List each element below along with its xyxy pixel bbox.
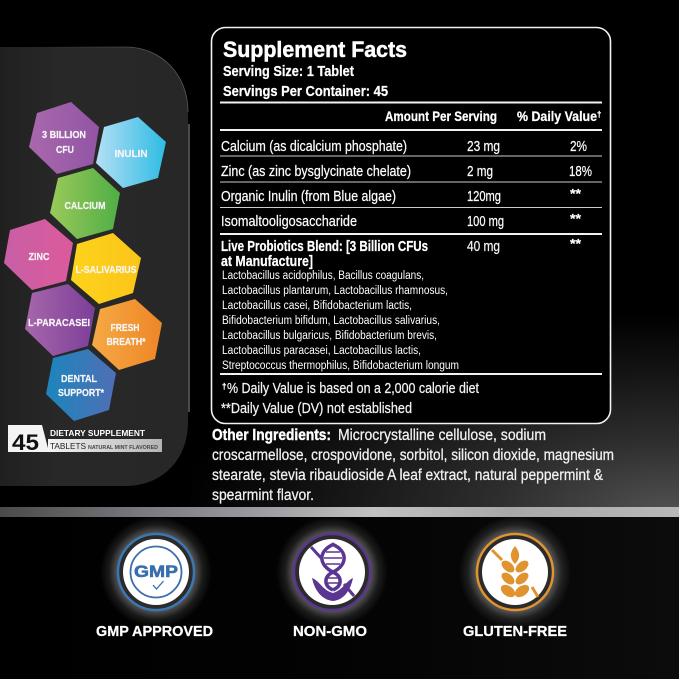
row: inulin: ** [570, 186, 582, 201]
hexagon: inulin: INULIN [114, 149, 148, 160]
row: calcium: Calcium (as dicalcium phosphate) [221, 139, 407, 155]
row: zinc: Zinc (as zinc bysglycinate chelate) [221, 164, 411, 180]
other ingredients: stearate, stevia ribaudioside A leaf extract, natural peppermint & [212, 467, 604, 484]
divider bar [0, 507, 679, 517]
row: inulin [221, 186, 582, 205]
hexagon: zinc: ZINC [28, 252, 50, 263]
row: probiotics blend: ** [570, 236, 582, 251]
footnote: DV not established: **Daily Value (DV) not established [221, 400, 412, 417]
probiotic strains list [222, 270, 459, 372]
background sheen [190, 300, 679, 507]
row: probiotics blend: 40 mg [467, 239, 500, 255]
badge: non-GMO: NON-GMO [293, 624, 367, 640]
hexagon: calcium [50, 168, 120, 239]
other ingredients [212, 427, 614, 504]
product count badge: NATURAL MINT FLAVORED [88, 445, 158, 451]
row: isomaltooligosaccharide: ** [570, 211, 582, 226]
badge: GMP approved: GMP APPROVED [96, 624, 213, 640]
row: calcium: 2% [570, 139, 587, 155]
badge: GMP approved: GMP [134, 562, 178, 581]
probiotic strains list: Streptococcus thermophilus, Bifidobacterium longum [222, 360, 459, 372]
probiotic strains list: Lactobacillus plantarum, Lactobacillus rhamnosus, [222, 285, 448, 297]
hexagon: dental support [46, 349, 116, 421]
hexagon: L-salivarius [71, 233, 141, 304]
row: inulin: 120mg [467, 189, 501, 205]
probiotic strains list: Bifidobacterium bifidum, Lactobacillus salivarius, [222, 315, 440, 327]
column head: amount: Amount Per Serving [385, 108, 497, 124]
row: calcium: 23 mg [467, 139, 500, 155]
hexagon: fresh breath [92, 299, 162, 370]
hexagon: L-paracasei [25, 284, 95, 356]
row: calcium [221, 139, 587, 155]
supplement facts panel [212, 28, 610, 424]
row: isomaltooligosaccharide: Isomaltooligosaccharide [221, 214, 357, 230]
probiotic strains list: Lactobacillus acidophilus, Bacillus coagulans, [222, 270, 424, 282]
hexagon: fresh breath: BREATH* [106, 337, 146, 348]
servings per container: Servings Per Container: 45 [223, 84, 388, 100]
row: probiotics blend [221, 236, 582, 270]
hexagon: L-paracasei: L-PARACASEI [28, 318, 90, 329]
row: inulin: Organic Inulin (from Blue algae) [221, 189, 396, 205]
hexagon: 3 billion CFU: 3 BILLION [42, 130, 86, 141]
panel title: Supplement Facts [223, 37, 407, 62]
row: zinc: 2 mg [467, 164, 493, 180]
footnote: daily value basis: % Daily Value is based on a 2,000 calorie diet [227, 380, 480, 397]
badge: non-GMO [276, 516, 388, 640]
badge: gluten-free [459, 516, 571, 640]
footnote dagger: † [222, 382, 226, 391]
probiotic strains list: Lactobacillus casei, Bifidobacterium lactis, [222, 300, 412, 312]
probiotic strains list: Lactobacillus paracasei, Lactobacillus lactis, [222, 345, 421, 357]
product count badge [8, 425, 162, 455]
product count badge: TABLETS [50, 441, 86, 451]
hexagon: 3 billion CFU [29, 102, 99, 174]
hexagon: 3 billion CFU: CFU [56, 145, 74, 156]
product count badge: 45 [12, 430, 39, 455]
row: zinc: 18% [569, 164, 592, 180]
hexagon: L-salivarius: L-SALIVARIUS [76, 265, 137, 276]
badge: GMP approved [96, 516, 213, 640]
row: isomaltooligosaccharide: 100 mg [467, 214, 504, 230]
hexagon: fresh breath: FRESH [110, 323, 140, 334]
other ingredients: Microcrystalline cellulose, sodium [338, 427, 546, 444]
product count badge: DIETARY SUPPLEMENT [50, 428, 146, 438]
serving size: Serving Size: 1 Tablet [223, 64, 354, 80]
hexagon: dental support: SUPPORT* [58, 388, 104, 399]
row: zinc [221, 164, 592, 180]
badge: gluten-free: GLUTEN-FREE [463, 624, 567, 640]
hexagon: zinc [4, 219, 73, 290]
row: probiotics blend: Live Probiotics Blend: [3 Billion CFUs [221, 239, 428, 255]
lower band background [0, 517, 679, 679]
row: probiotics blend: at Manufacture] [221, 254, 313, 270]
probiotic strains list: Lactobacillus bulgaricus, Bifidobacterium brevis, [222, 330, 437, 342]
other ingredients: spearmint flavor. [212, 487, 314, 504]
other ingredients: croscarmellose, crospovidone, sorbitol, silicon dioxide, magnesium [212, 447, 614, 464]
other ingredients: Other Ingredients: [212, 427, 331, 444]
hexagon: inulin [96, 117, 166, 188]
product tablet tin [0, 47, 190, 486]
hexagon: dental support: DENTAL [61, 374, 97, 385]
row: isomaltooligosaccharide [221, 211, 582, 230]
column head: daily value: % Daily Value [517, 108, 597, 124]
dagger mark: † [597, 110, 601, 119]
hexagon: calcium: CALCIUM [64, 201, 106, 212]
